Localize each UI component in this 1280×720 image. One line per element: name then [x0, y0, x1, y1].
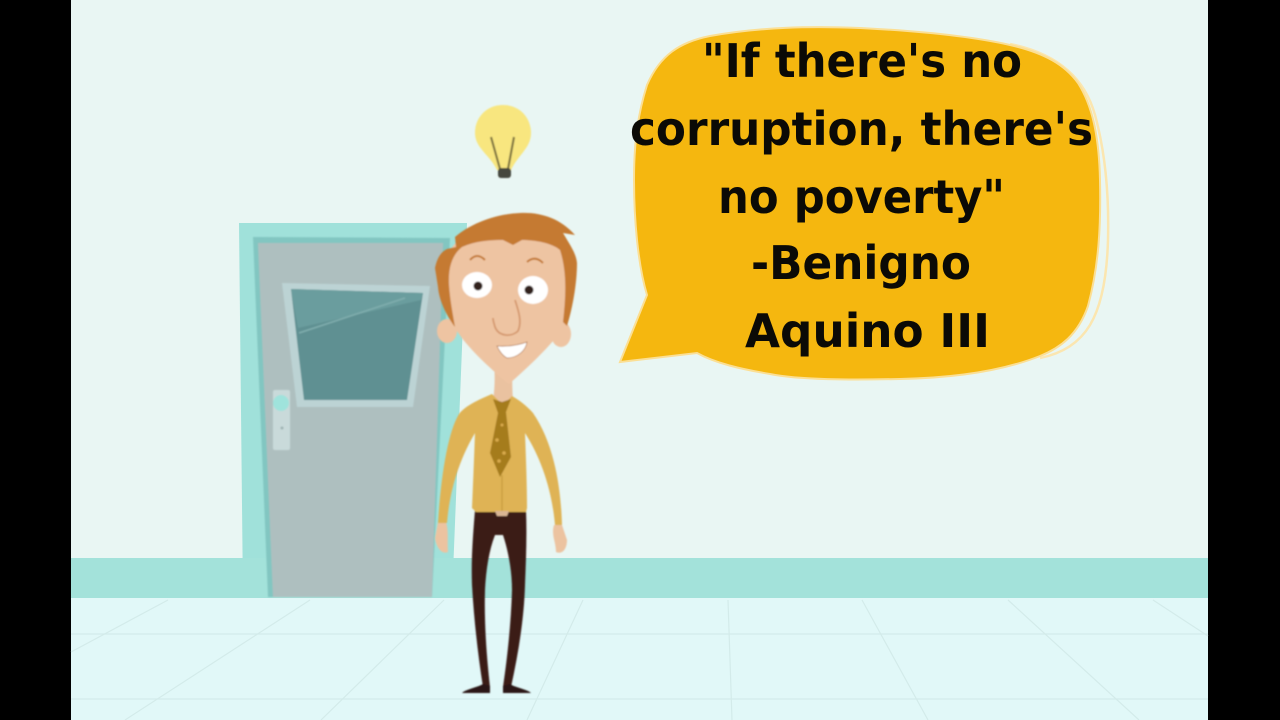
quote text: "If there's no — [702, 34, 1022, 88]
character — [435, 213, 577, 693]
neck — [493, 360, 513, 408]
quote text: -Benigno — [751, 236, 971, 290]
tiled floor — [71, 598, 1208, 720]
door panel — [258, 243, 443, 597]
speech bubble — [620, 27, 1108, 379]
tie — [490, 399, 511, 477]
hair — [435, 213, 577, 327]
bubble pale offset outline — [1010, 44, 1108, 358]
light bulb icon — [475, 105, 531, 178]
door frame — [239, 223, 467, 598]
quote text: Aquino III — [745, 304, 990, 358]
eyebrows — [470, 256, 543, 263]
quote text — [630, 34, 1093, 358]
bubble shape — [620, 27, 1100, 379]
wall background — [71, 0, 1208, 560]
door handle — [273, 390, 290, 450]
belt skin gap — [495, 511, 509, 516]
ears — [437, 319, 457, 343]
legs and trousers — [472, 510, 526, 687]
face — [448, 240, 568, 384]
mouth — [497, 342, 527, 358]
shirt — [438, 394, 562, 525]
hands — [435, 522, 567, 553]
shoes — [462, 684, 531, 693]
door window — [282, 283, 430, 407]
door shadow edge — [253, 237, 450, 597]
door — [253, 237, 450, 597]
shirt placket — [501, 475, 503, 512]
nose — [493, 300, 520, 335]
quote text: no poverty" — [718, 170, 1005, 224]
quote text: corruption, there's — [630, 102, 1093, 156]
baseboard — [71, 558, 1208, 598]
eyes — [462, 272, 548, 304]
